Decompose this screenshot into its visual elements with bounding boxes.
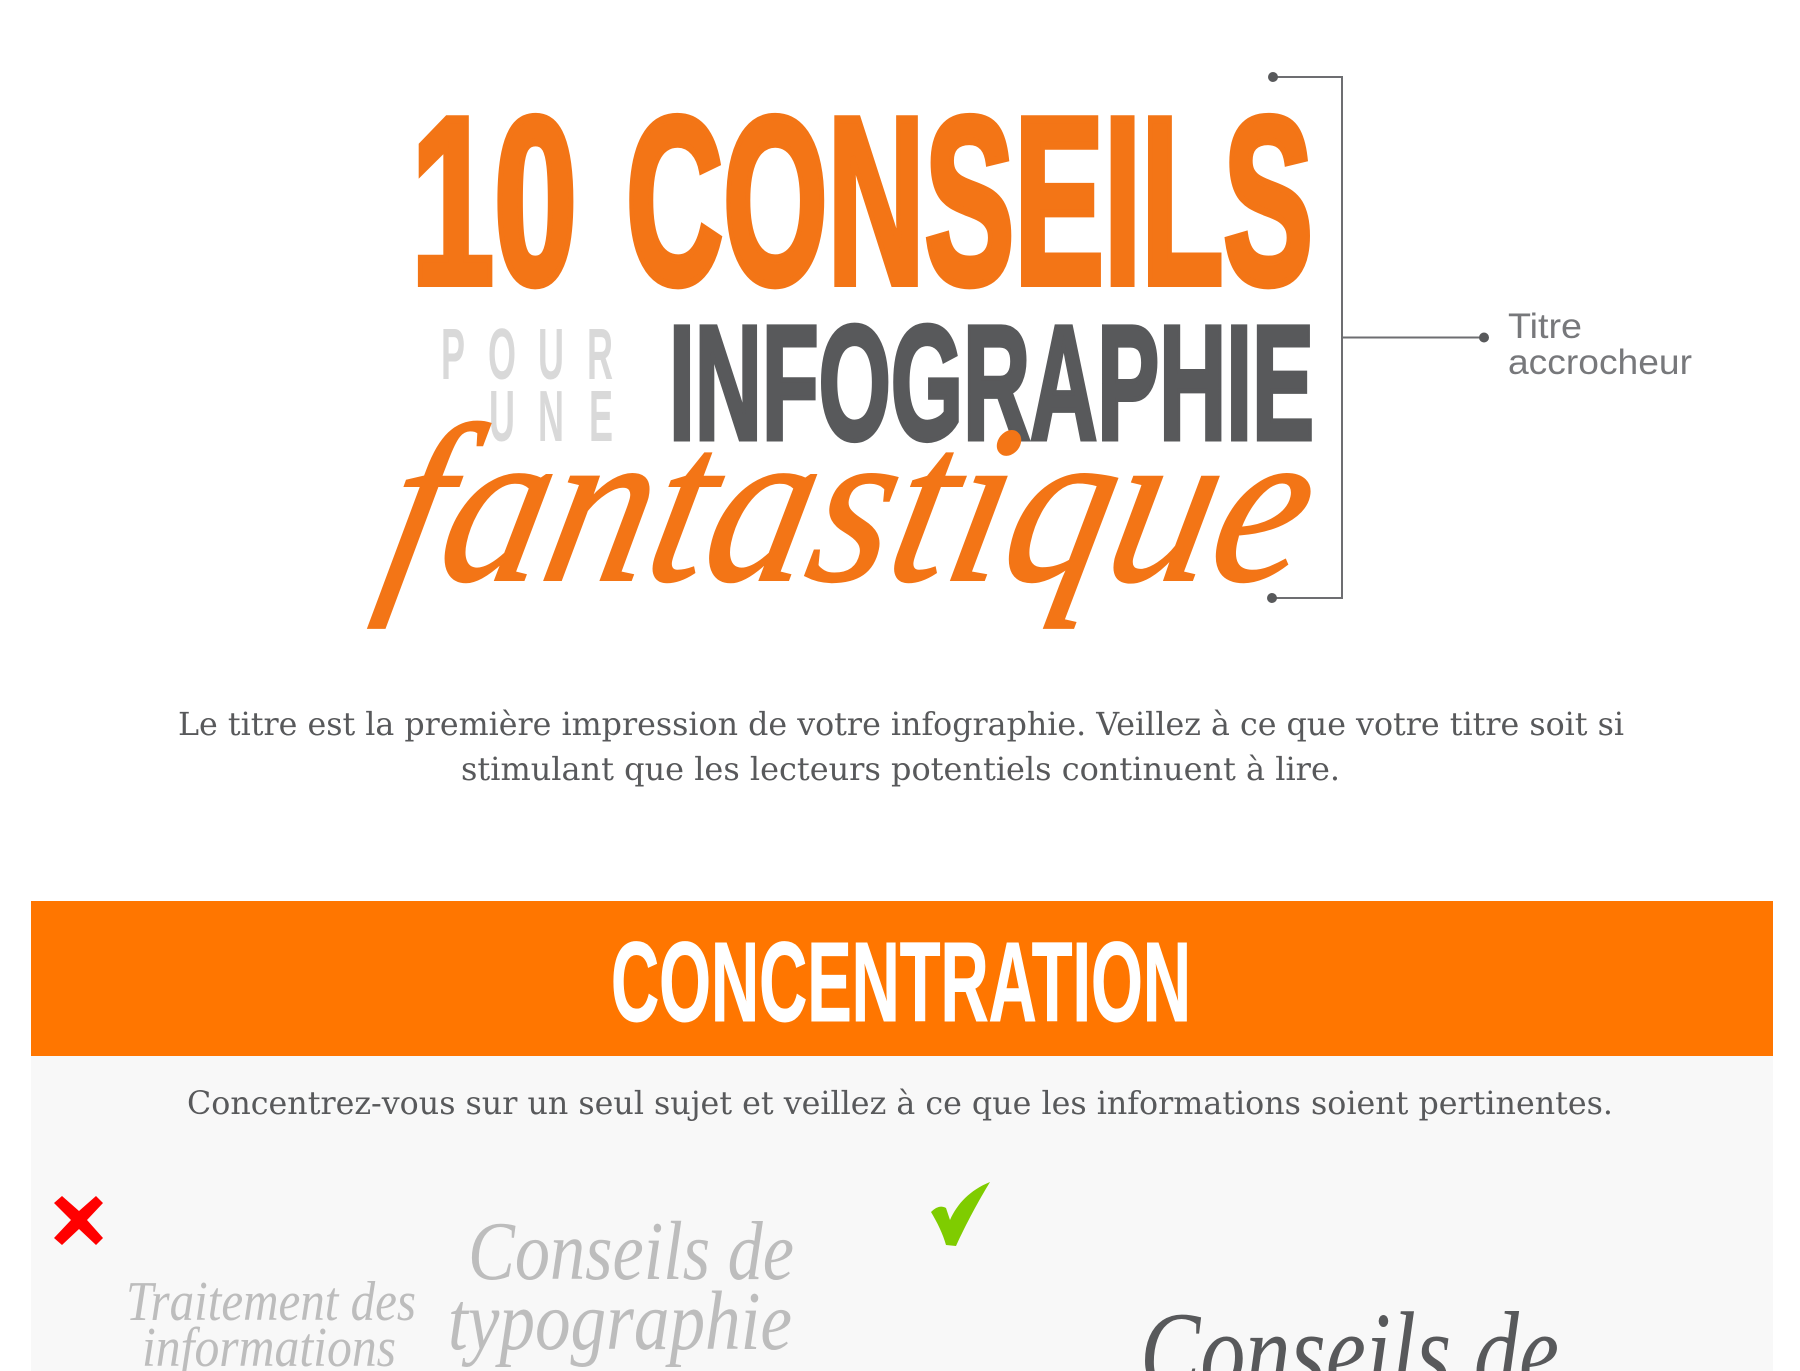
- icon: green check: [931, 1182, 990, 1246]
- intro paragraph: [178, 705, 1624, 788]
- title block: [365, 69, 1338, 629]
- annotation bracket: titre accrocheur: [1267, 72, 1692, 603]
- annotation label: accrocheur: [1508, 343, 1692, 382]
- intro paragraph: stimulant que les lecteurs potentiels continuent à lire.: [461, 750, 1340, 788]
- bad example: scattered topics: typographie: [448, 1275, 792, 1368]
- icon: red cross: [54, 1196, 103, 1245]
- title line: infographie: INFOGRAPHIE: [669, 291, 1314, 474]
- panel background: [31, 1056, 1773, 1371]
- panel: concentration: [31, 901, 1773, 1371]
- title line: 10 conseils: 10: [411, 69, 577, 334]
- section description: Concentrez-vous sur un seul sujet et veillez à ce que les informations soient pertinentes.: [187, 1084, 1613, 1122]
- intro paragraph: Le titre est la première impression de votre infographie. Veillez à ce que votre titre soit si: [178, 705, 1624, 743]
- bad example: scattered topics: Conseils de: [468, 1205, 794, 1298]
- bad example: scattered topics: Traitement des: [126, 1271, 416, 1333]
- annotation label: [1508, 307, 1692, 382]
- title line: 10 conseils: [411, 69, 1313, 334]
- bracket lines: [1272, 77, 1483, 598]
- annotation label: Titre: [1508, 307, 1582, 346]
- title small words: pour: POUR: [441, 314, 613, 395]
- section heading: CONCENTRATION: [611, 919, 1191, 1045]
- title line: fantastique: fantastique: [365, 380, 1338, 629]
- bad example: scattered topics: [126, 1205, 794, 1371]
- title small words: une: UNE: [489, 376, 613, 457]
- bracket end dots: [1267, 72, 1489, 603]
- section header band: [31, 901, 1773, 1056]
